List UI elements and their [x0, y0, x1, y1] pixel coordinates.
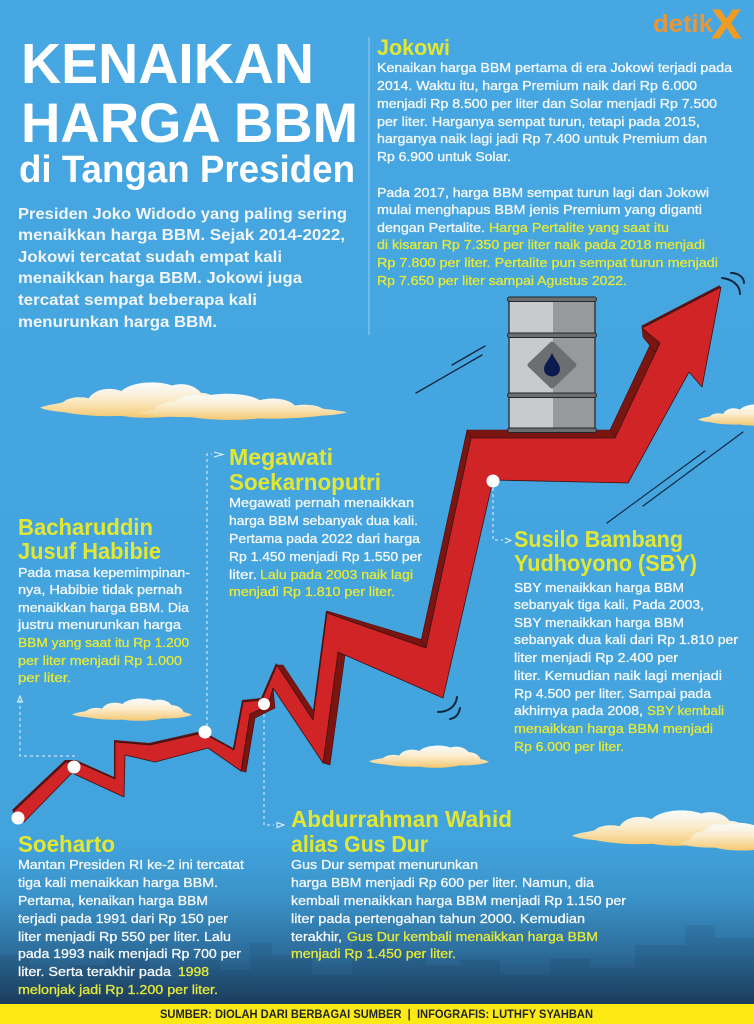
text: Jokowi body: di kisaran Rp 7.350 per liter naik pada 2018 menjadi: [377, 237, 705, 252]
text: Habibie body: BBM yang saat itu Rp 1.200: [18, 635, 189, 650]
text: Gus Dur body: terakhir,: [291, 929, 342, 944]
divider: [368, 37, 370, 335]
title: [19, 32, 358, 191]
text: Jokowi body: [377, 60, 733, 288]
text: Soeharto body: 1998: [178, 964, 209, 979]
text: SBY body: Rp 4.500 per liter. Sampai pada: [514, 686, 712, 701]
footer band: SUMBER: DIOLAH DARI BERBAGAI SUMBER | INFOGRAFIS: LUTHFY SYAHBAN: [160, 1007, 593, 1021]
text: Gus Dur body: liter pada pertengahan tahun 2000. Kemudian: [291, 911, 585, 926]
text: Megawati body: harga BBM sebanyak dua kali.: [229, 513, 418, 528]
heading: Gus Dur: alias Gus Dur: [291, 831, 428, 857]
text: Soeharto body: liter menjadi Rp 550 per liter. Lalu: [18, 929, 231, 944]
text: Megawati body: liter.: [229, 567, 257, 582]
text: SBY body: SBY menaikkan harga BBM: [514, 615, 684, 630]
panel: Soeharto: [18, 831, 244, 997]
panel: Gus Dur: [291, 806, 627, 961]
text: Jokowi body: menjadi Rp 8.500 per liter dan Solar menjadi Rp 7.500: [377, 96, 717, 111]
heading: SBY: Yudhoyono (SBY): [514, 550, 697, 576]
heading: Soeharto: Soeharto: [18, 831, 115, 857]
text: Habibie body: per liter menjadi Rp 1.000: [18, 653, 182, 668]
icon: oil barrel: [508, 297, 596, 432]
clouds: [40, 382, 754, 851]
heading: Gus Dur: Abdurrahman Wahid: [291, 806, 512, 832]
logo: detikX: detik: [653, 10, 713, 38]
text: Soeharto body: Mantan Presiden RI ke-2 ini tercatat: [18, 857, 244, 872]
rising red arrow chart: [12, 285, 721, 822]
text: Soeharto body: tiga kali menaikkan harga BBM.: [18, 875, 218, 890]
text: Soeharto body: Pertama, kenaikan harga BBM: [18, 893, 208, 908]
panel: Megawati Soekarnoputri: [229, 444, 423, 599]
heading: Megawati: Megawati: [229, 444, 333, 470]
text: Megawati body: Rp 1.450 menjadi Rp 1.550 per: [229, 549, 423, 564]
text: SBY body: SBY menaikkan harga BBM: [514, 580, 684, 595]
text: SBY body: sebanyak tiga kali. Pada 2003,: [514, 597, 704, 612]
title: KENAIKAN: [21, 32, 314, 96]
intro paragraph: Presiden Joko Widodo yang paling sering: [18, 206, 347, 223]
heading: Habibie: Bacharuddin: [18, 514, 153, 540]
text: Soeharto body: terjadi pada 1991 dari Rp 150 per: [18, 911, 229, 926]
heading: Megawati: [229, 444, 381, 495]
heading: Habibie: Jusuf Habibie: [18, 538, 161, 564]
heading: Habibie: [18, 514, 161, 564]
text: SBY body: liter. Kemudian naik lagi menjadi: [514, 668, 722, 683]
intro paragraph: menurunkan harga BBM.: [18, 314, 217, 331]
title: di Tangan Presiden: [19, 149, 355, 191]
timeline dots: [12, 474, 500, 824]
heading: SBY: Susilo Bambang: [514, 526, 683, 552]
text: Soeharto body: [18, 857, 244, 997]
text: Jokowi body: 2014. Waktu itu, harga Premium naik dari Rp 6.000: [377, 78, 697, 93]
text: SBY body: liter menjadi Rp 2.400 per: [514, 650, 679, 665]
icon: oil drop: [544, 353, 560, 376]
text: SBY body: menaikkan harga BBM menjadi: [514, 721, 713, 736]
logo: detikX: [653, 1, 741, 47]
text: Jokowi body: per liter. Harganya sempat turun, tetapi pada 2015,: [377, 114, 700, 129]
text: Gus Dur body: [291, 857, 627, 961]
text: Jokowi body: Harga Pertalite yang saat itu: [489, 220, 669, 235]
logo: detikX: X: [712, 1, 741, 47]
text: Megawati body: [229, 495, 423, 599]
text: Megawati body: Lalu pada 2003 naik lagi: [260, 567, 413, 582]
text: Megawati body: menjadi Rp 1.810 per liter.: [229, 584, 395, 599]
heading: Gus Dur: [291, 806, 512, 857]
heading: Megawati: Soekarnoputri: [229, 469, 381, 495]
text: Jokowi body: harganya naik lagi jadi Rp 7.400 untuk Premium dan: [377, 131, 707, 146]
text: Megawati body: Megawati pernah menaikkan: [229, 495, 414, 510]
icon: diamond label: [530, 344, 574, 386]
intro paragraph: [18, 206, 347, 331]
title: HARGA BBM: [21, 91, 358, 154]
text: Habibie body: nya, Habibie tidak pernah: [18, 582, 182, 597]
arrow red face: [13, 287, 721, 822]
text: Jokowi body: Rp 7.800 per liter. Pertalite pun sempat turun menjadi: [377, 255, 718, 270]
text: Jokowi body: mulai menghapus BBM jenis Premium yang diganti: [377, 202, 702, 217]
text: SBY body: SBY kembali: [647, 703, 724, 718]
dashed connectors: [18, 452, 511, 828]
text: Gus Dur body: menjadi Rp 1.450 per liter.: [291, 946, 456, 961]
text: Habibie body: menaikkan harga BBM. Dia: [18, 600, 190, 615]
text: Habibie body: Pada masa kepemimpinan-: [18, 565, 190, 580]
text: Gus Dur body: kembali menaikkan harga BBM menjadi Rp 1.150 per: [291, 893, 627, 908]
text: Megawati body: Pertama pada 2022 dari harga: [229, 531, 421, 546]
intro paragraph: menaikkan harga BBM. Jokowi juga: [18, 270, 302, 287]
text: Jokowi body: dengan Pertalite.: [377, 220, 485, 235]
text: Gus Dur body: Gus Dur kembali menaikkan harga BBM: [347, 929, 598, 944]
text: Gus Dur body: harga BBM menjadi Rp 600 per liter. Namun, dia: [291, 875, 595, 890]
arrow shadow edge: [12, 285, 720, 820]
text: Soeharto body: pada 1993 naik menjadi Rp 700 per: [18, 946, 242, 961]
intro paragraph: tercatat sempat beberapa kali: [18, 292, 257, 309]
text: Jokowi body: Pada 2017, harga BBM sempat turun lagi dan Jokowi: [377, 185, 709, 200]
text: SBY body: akhirnya pada 2008,: [514, 703, 643, 718]
panel: SBY: [514, 526, 739, 754]
intro paragraph: menaikkan harga BBM. Sejak 2014-2022,: [18, 227, 345, 244]
heading: Jokowi: Jokowi: [377, 35, 450, 60]
intro paragraph: Jokowi tercatat sudah empat kali: [18, 249, 282, 266]
text: Habibie body: per liter.: [18, 670, 71, 685]
footer band: [0, 1004, 754, 1024]
text: SBY body: [514, 580, 739, 754]
text: Jokowi body: Kenaikan harga BBM pertama di era Jokowi terjadi pada: [377, 60, 733, 75]
text: SBY body: sebanyak dua kali dari Rp 1.810 per: [514, 632, 739, 647]
text: Soeharto body: melonjak jadi Rp 1.200 per liter.: [18, 982, 218, 997]
text: Habibie body: justru menurunkan harga: [17, 617, 182, 632]
panel: Habibie: [17, 514, 190, 685]
motion lines: [416, 273, 744, 719]
panel: Jokowi: [377, 35, 733, 288]
text: Jokowi body: Rp 7.650 per liter sampai Agustus 2022.: [377, 273, 627, 288]
arrow dark sides: [241, 328, 660, 772]
text: Gus Dur body: Gus Dur sempat menurunkan: [291, 857, 478, 872]
text: Habibie body: [17, 565, 190, 685]
text: Jokowi body: Rp 6.900 untuk Solar.: [377, 149, 511, 164]
city skyline: [0, 925, 754, 1005]
heading: SBY: [514, 526, 697, 576]
text: SBY body: Rp 6.000 per liter.: [514, 739, 624, 754]
text: Soeharto body: liter. Serta terakhir pada: [18, 964, 172, 979]
